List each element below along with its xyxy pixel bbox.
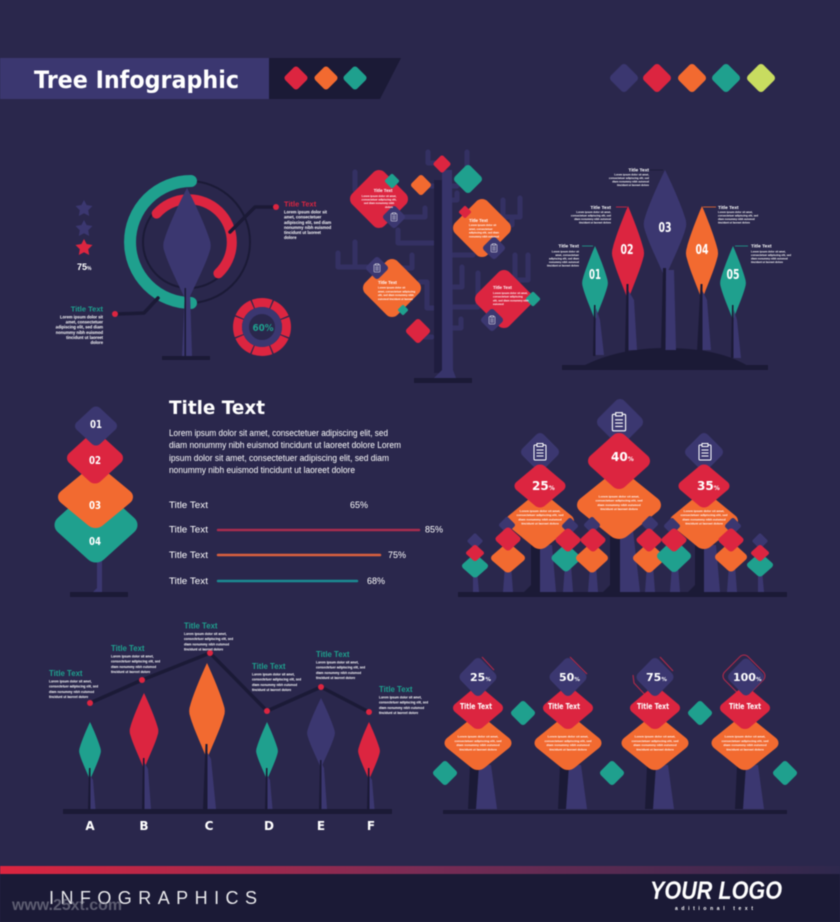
tree 03: consectetuer adipiscing elit, sed	[609, 176, 649, 180]
tree 02: diam nonummy nibh euismod	[574, 217, 611, 221]
hill and ground	[562, 348, 768, 370]
node: red right: elit, sed diam nonummy nibh	[493, 298, 529, 302]
axis letters: D	[264, 819, 274, 833]
labels A: diam nonummy nibh euismod	[49, 690, 94, 694]
labels B: Title Text	[111, 644, 145, 653]
tree 25%: Lorem ipsum dolor sit amet,	[458, 734, 499, 738]
tree 02: consectetuer adipiscing elit, sed	[571, 214, 611, 218]
axis letters: A	[85, 819, 95, 833]
labels A: Title Text	[49, 669, 83, 678]
panel: percentage trees	[432, 653, 798, 814]
small trees	[461, 515, 774, 592]
tree 01: Lorem ipsum dolor sit	[552, 250, 579, 254]
panel: stacked diamond tree	[50, 404, 142, 597]
labels B: diam nonummy nibh euismod	[111, 665, 156, 669]
tree 75%: diam nonummy nibh euismod	[633, 743, 677, 747]
panel: circular tree chart	[56, 181, 332, 360]
tree 35%: consectetuer adipiscing elit, sed	[680, 513, 728, 517]
panel: stacked diamond tree: 02	[89, 454, 101, 467]
node: red top left	[347, 167, 411, 231]
tree 35%: tincidunt ut laoreet dolore	[685, 522, 723, 526]
tree 04: tincidunt ut laoreet dolore	[718, 220, 751, 224]
labels D: diam nonummy nibh euismod	[252, 683, 297, 687]
branches	[338, 152, 528, 337]
tree 50%: Title Text	[548, 702, 580, 711]
node: orange left	[360, 256, 424, 320]
node: red top left: consectetuer adipiscing elit,	[362, 198, 397, 202]
node: orange left: euismod tincidunt ut laoreet	[378, 297, 413, 301]
tree 03	[609, 168, 686, 350]
labels F: tincidunt ut laoreet dolore	[379, 711, 419, 715]
node: orange right: adipiscing elit, sed diam	[469, 231, 500, 235]
callout left: Title Text	[71, 304, 103, 314]
tree 04: consectetuer adipiscing elit, sed	[718, 214, 758, 218]
watermark: www.25xt.com	[11, 897, 122, 914]
tree 100%: Lorem ipsum dolor sit amet,	[725, 734, 766, 738]
tree 04: Title Text	[718, 205, 739, 211]
tree 02: Lorem ipsum dolor sit amet,	[576, 210, 611, 214]
panel: stacked diamond tree: 04	[89, 535, 101, 548]
callout left: amet, consectetuer	[66, 320, 103, 325]
labels F	[379, 685, 428, 715]
labels F: diam nonummy nibh euismod	[379, 706, 424, 710]
tree 02: tincidunt ut laoreet dolore	[579, 220, 612, 224]
tree 40%: 40%	[611, 450, 634, 464]
tree 75%: consectetuer adipiscing elit, sed	[631, 739, 679, 743]
labels C: Lorem ipsum dolor sit amet,	[184, 632, 227, 636]
tree 01: amet, consectetuer	[555, 253, 579, 257]
tree 05: Lorem ipsum dolor sit amet,	[751, 250, 786, 254]
callout left: Lorem ipsum dolor sit	[60, 314, 104, 320]
tree 35%: 35%	[697, 479, 720, 493]
tree 50%: 50%	[559, 671, 580, 684]
tree 05: tincidunt ut laoreet dolore	[751, 260, 784, 264]
tree 25%: tincidunt ut laoreet dolore	[459, 747, 497, 751]
tree 04: diam nonummy nibh euismod	[718, 217, 755, 221]
labels B: Lorem ipsum dolor sit amet,	[111, 654, 154, 658]
axis letters: C	[205, 819, 214, 833]
callout right: amet, consectetuer	[284, 215, 322, 220]
labels F: Title Text	[379, 685, 413, 694]
axis letters: B	[139, 819, 149, 833]
labels C: Title Text	[184, 622, 218, 630]
labels C	[184, 622, 233, 652]
callout right: Lorem ipsum dolor sit	[284, 210, 328, 214]
labels D: consectetuer adipiscing elit, sed	[252, 678, 301, 682]
tree 50%: consectetuer adipiscing elit, sed	[544, 739, 592, 743]
bar chart: Title Text	[169, 550, 208, 561]
tree 25%: consectetuer adipiscing elit, sed	[516, 513, 564, 517]
panel: forest of diamond trees	[458, 396, 787, 597]
tree 25%: diam nonummy nibh euismod	[456, 743, 500, 747]
node: orange left: Lorem ipsum dolor sit	[378, 286, 405, 290]
callout left: adipiscing elit, sed diam	[56, 325, 103, 330]
tree 40%: Lorem ipsum dolor sit amet,	[599, 494, 640, 498]
tree 100%: tincidunt ut laoreet dolore	[726, 747, 764, 751]
node: red right: euismod	[493, 302, 504, 306]
tree 100%: 100%	[733, 671, 762, 684]
tree 01: adipiscing elit, sed diam	[549, 256, 580, 260]
tree 04: Lorem ipsum dolor sit amet,	[718, 210, 753, 214]
bar chart: 68%	[367, 576, 386, 587]
labels F: Lorem ipsum dolor sit amet,	[379, 696, 422, 700]
axis letters: E	[317, 819, 325, 833]
tree 25%	[441, 656, 515, 809]
bar chart: Title Text	[169, 576, 208, 587]
donut chart 60%	[238, 302, 286, 352]
tree 35%	[666, 431, 742, 592]
tree 02	[571, 205, 644, 352]
bar chart: 75%	[388, 550, 407, 561]
node: orange left: Title Text	[378, 280, 397, 285]
tree 50%: Lorem ipsum dolor sit amet,	[548, 734, 589, 738]
labels D: Lorem ipsum dolor sit amet,	[252, 672, 295, 676]
title: Tree Infographic	[34, 66, 239, 94]
text block: title and paragraph: Title Text	[169, 397, 265, 419]
tree 100%: consectetuer adipiscing elit, sed	[721, 739, 769, 743]
labels D: Title Text	[252, 662, 286, 671]
labels E	[316, 650, 365, 680]
callout right: dolore	[284, 235, 297, 240]
tree 01: 01	[589, 268, 601, 283]
labels D	[252, 662, 301, 692]
dots	[87, 650, 372, 715]
labels B: consectetuer adipiscing elit, sed	[111, 660, 160, 664]
node: red right: consectetuer adipiscing	[493, 295, 523, 299]
tree 05: Title Text	[751, 244, 772, 250]
text block: title and paragraph	[169, 397, 401, 475]
star rating	[76, 200, 92, 272]
node: orange right: amet, consectetuer	[469, 227, 493, 231]
tree 01	[547, 244, 608, 356]
node: red right: Lorem ipsum dolor sit amet,	[493, 291, 528, 295]
bar chart: Title Text	[169, 500, 208, 511]
logo subtitle: aditional text	[675, 906, 753, 912]
tree 04: 04	[696, 243, 708, 258]
labels E: tincidunt ut laoreet dolore	[316, 676, 356, 680]
node: red top left: sed diam nonummy nibh	[364, 201, 395, 205]
labels D: tincidunt ut laoreet dolore	[252, 688, 292, 692]
text block: title and paragraph: nonummy nibh euismod tincidunt ut laoreet dolore	[169, 465, 355, 475]
labels E: Title Text	[316, 650, 350, 659]
node: red right: Title Text	[493, 285, 512, 290]
tree 03: Lorem ipsum dolor sit amet,	[614, 172, 649, 176]
tree 100%	[708, 653, 782, 809]
labels F: consectetuer adipiscing elit, sed	[379, 701, 428, 705]
node: orange right: Lorem ipsum dolor sit	[469, 223, 496, 227]
trunk	[414, 170, 472, 383]
tree 25%: diam nonummy nibh euismod	[518, 517, 562, 521]
callout right	[230, 200, 332, 240]
tree 50%	[531, 656, 605, 809]
tree 75%: Title Text	[637, 702, 669, 711]
tree 01: tincidunt ut laoreet dolore	[547, 264, 580, 268]
tree 25%: consectetuer adipiscing elit, sed	[454, 739, 502, 743]
tree 75%	[618, 656, 692, 809]
tree 100%: diam nonummy nibh euismod	[723, 743, 767, 747]
node: orange left: amet, consectetuer adipiscing	[378, 289, 416, 293]
text block: title and paragraph: Lorem ipsum dolor sit amet, consectetuer adipiscing elit, sed	[169, 428, 388, 438]
node: red top left: dolore	[385, 205, 394, 209]
donut chart 60%: 60%	[252, 323, 274, 334]
connector line	[90, 653, 369, 712]
tree 40%: consectetuer adipiscing elit, sed	[595, 499, 643, 503]
labels B	[111, 644, 160, 674]
tree 01: nonummy nibh euismod	[549, 260, 579, 264]
labels A: tincidunt ut laoreet dolore	[49, 695, 89, 699]
tree 75%: Lorem ipsum dolor sit amet,	[635, 734, 676, 738]
tree 04	[686, 205, 758, 352]
labels E: Lorem ipsum dolor sit amet,	[316, 660, 359, 664]
node: red top left: Title Text	[374, 188, 393, 193]
bar chart: 65%	[350, 500, 369, 511]
tree 40%	[572, 396, 666, 592]
colour palette	[608, 62, 777, 94]
panel: stacked diamond tree: 01	[90, 418, 102, 431]
node: orange right: Title Text	[469, 218, 488, 223]
tree 40%: tincidunt ut laoreet dolore	[600, 507, 638, 511]
callout left: tincidunt ut laoreet	[66, 335, 104, 340]
tree 25%	[502, 431, 578, 592]
labels A: consectetuer adipiscing elit, sed	[49, 685, 98, 689]
tree 02: 02	[620, 243, 634, 258]
tree 03: 03	[658, 221, 672, 236]
footer	[0, 866, 840, 922]
tree 75%: 75%	[646, 671, 667, 684]
tree 35%: diam nonummy nibh euismod	[682, 517, 726, 521]
labels C: consectetuer adipiscing elit, sed	[184, 637, 233, 641]
labels C: diam nonummy nibh euismod	[184, 642, 229, 646]
tree 05: consectetuer adipiscing elit, sed	[751, 253, 791, 257]
tree 25%: tincidunt ut laoreet dolore	[521, 522, 559, 526]
node: orange right	[450, 196, 514, 260]
axis letters	[85, 819, 375, 833]
panel: central branching tree	[338, 152, 541, 383]
tree 50%: tincidunt ut laoreet dolore	[549, 747, 587, 751]
tree 100%: Title Text	[729, 702, 761, 711]
labels E: consectetuer adipiscing elit, sed	[316, 666, 365, 670]
text block: title and paragraph: diam nonummy nibh euismod tincidunt ut laoreet dolore Lorem	[169, 440, 401, 450]
footer label: INFOGRAPHICS	[49, 888, 257, 908]
tree 05: 05	[726, 268, 740, 283]
star rating: 75%	[77, 262, 92, 272]
tree 25%: Lorem ipsum dolor sit amet,	[520, 509, 561, 513]
node: orange right: nonummy nibh euismod	[469, 234, 499, 238]
panel: line and tree chart A to F	[49, 622, 428, 833]
bar chart	[169, 500, 444, 587]
tree 25%: 25%	[470, 671, 491, 684]
labels E: diam nonummy nibh euismod	[316, 671, 361, 675]
tree 03: Title Text	[628, 168, 649, 174]
tree 75%: tincidunt ut laoreet dolore	[636, 747, 674, 751]
tree 50%: diam nonummy nibh euismod	[546, 743, 590, 747]
header banner	[0, 58, 401, 99]
panel: stacked diamond tree: 03	[89, 499, 101, 512]
callout left: dolore	[90, 340, 104, 345]
labels A	[49, 669, 98, 699]
tree 03: tincidunt ut laoreet dolore	[617, 183, 650, 187]
callout left: nonummy nibh euismod	[56, 330, 103, 335]
node: red top left: Lorem ipsum dolor sit amet,	[362, 194, 397, 198]
tree 35%: Lorem ipsum dolor sit amet,	[684, 509, 725, 513]
bar chart: 85%	[425, 524, 444, 536]
tree 25%: Title Text	[460, 702, 492, 711]
node: red right	[472, 267, 541, 332]
tree 01: Title Text	[558, 244, 579, 250]
tree 40%: diam nonummy nibh euismod	[597, 503, 641, 507]
tree 03: diam nonummy nibh euismod	[612, 180, 649, 184]
callout right: tincidunt ut laoreet	[284, 230, 321, 235]
axis letters: F	[367, 819, 375, 833]
labels A: Lorem ipsum dolor sit amet,	[49, 680, 92, 684]
labels B: tincidunt ut laoreet dolore	[111, 670, 151, 674]
teal accents	[432, 700, 798, 786]
tree 05	[720, 244, 791, 358]
tree 25%: 25%	[532, 479, 555, 493]
tree 05: diam nonummy nibh euismod	[751, 256, 788, 260]
callout right: adipiscing elit, sed diam	[284, 220, 332, 225]
tree 02: Title Text	[590, 205, 611, 211]
tree	[162, 188, 211, 360]
bar chart: Title Text	[169, 524, 208, 536]
callout left	[56, 298, 158, 345]
panel: five numbered trees	[547, 168, 791, 370]
node: orange left: elit, sed diam nonummy nibh	[378, 293, 414, 297]
logo: YOUR LOGO	[650, 877, 782, 905]
trees	[79, 663, 380, 809]
labels C: tincidunt ut laoreet dolore	[184, 648, 224, 652]
text block: title and paragraph: ipsum dolor sit amet, consectetuer adipiscing elit, sed diam	[169, 453, 389, 463]
callout right: Title Text	[284, 200, 317, 208]
callout right: nonummy nibh euismod	[284, 225, 332, 230]
